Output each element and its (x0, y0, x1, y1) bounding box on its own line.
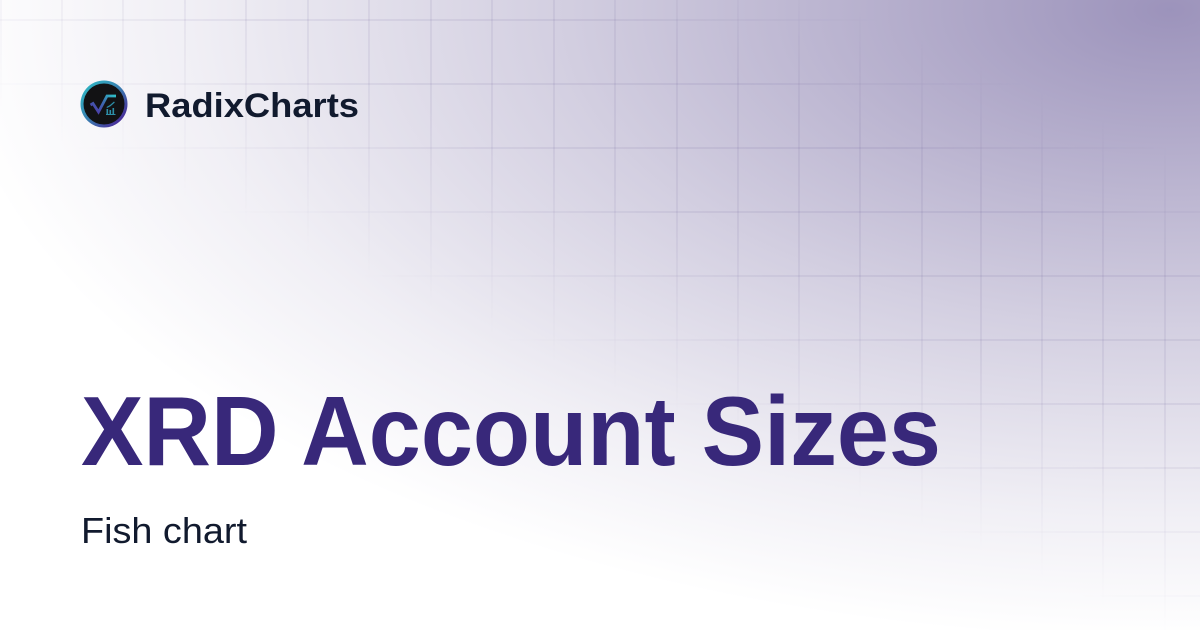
subtitle: Fish chart (81, 510, 247, 551)
icon: mini bar chart (106, 102, 116, 115)
logo (80, 80, 128, 128)
logo badge (80, 80, 128, 128)
icon: square root (90, 96, 116, 112)
brand name: RadixCharts (145, 87, 359, 125)
title: XRD Account Sizes (81, 376, 941, 486)
